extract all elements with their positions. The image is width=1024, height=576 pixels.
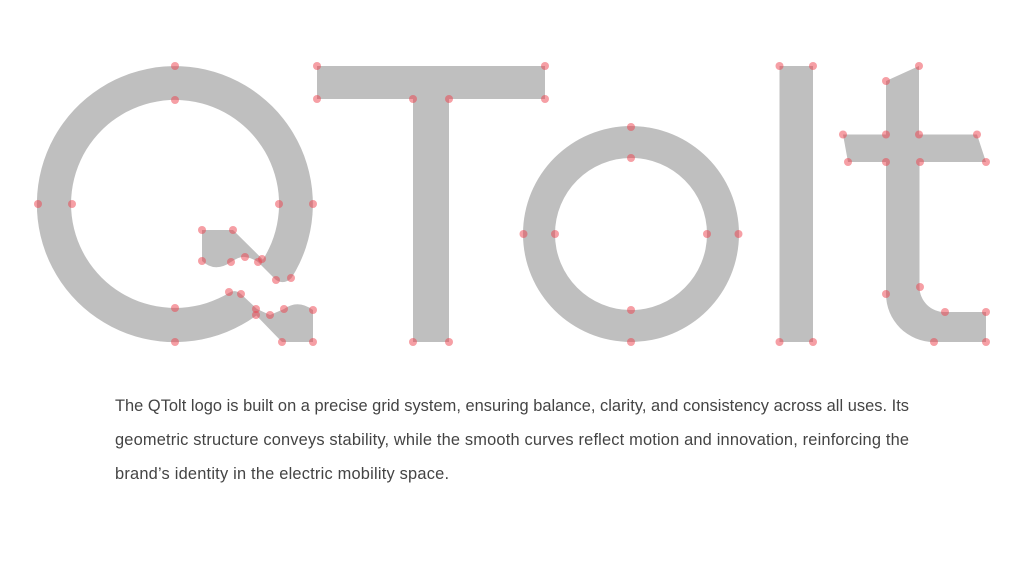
letter Q <box>37 66 313 342</box>
logo wordmark: QTolt <box>37 66 986 342</box>
description paragraph <box>115 397 909 483</box>
description paragraph: geometric structure conveys stability, while the smooth curves reflect motion and innovation, reinforcing the <box>115 431 909 449</box>
description paragraph: The QTolt logo is built on a precise grid system, ensuring balance, clarity, and consistency across all uses. Its <box>115 397 909 415</box>
letter t <box>843 66 986 342</box>
letter T <box>317 66 545 342</box>
letter o <box>523 126 739 342</box>
description paragraph: brand’s identity in the electric mobility space. <box>115 465 449 483</box>
construction anchor points <box>34 62 990 346</box>
letter l <box>780 66 813 342</box>
